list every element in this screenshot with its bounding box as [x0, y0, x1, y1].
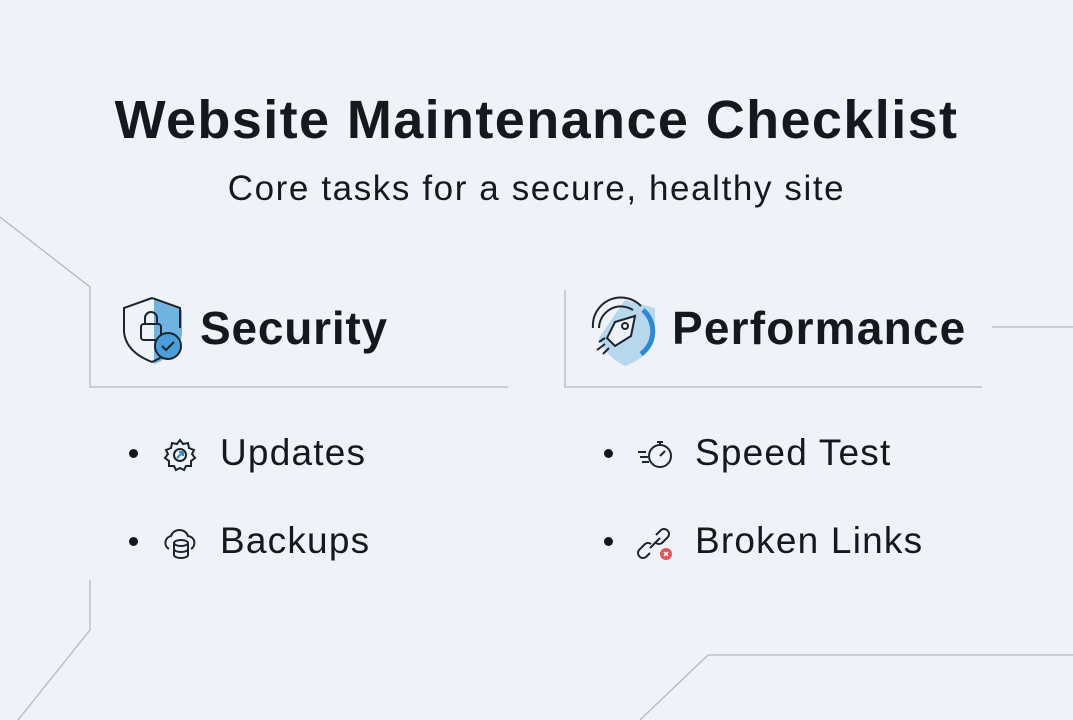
icon: broken link — [637, 528, 672, 560]
title: Website Maintenance Checklist — [115, 90, 958, 150]
heading: Performance — [672, 302, 966, 354]
panel: security — [123, 297, 388, 364]
panel: performance — [592, 296, 966, 366]
item: speed test: Speed Test — [695, 432, 891, 473]
item: backups — [129, 520, 370, 561]
icon: cloud db — [164, 529, 196, 559]
heading: Security — [200, 302, 388, 354]
icon: stopwatch — [638, 441, 672, 468]
icon: rocket gauge — [592, 296, 656, 366]
list: performance — [604, 432, 923, 561]
icon: shield — [123, 297, 182, 364]
item: updates — [129, 432, 366, 473]
item: backups: Backups — [220, 520, 370, 561]
icon: gear — [164, 438, 196, 472]
list: security — [129, 432, 370, 561]
subtitle: Core tasks for a secure, healthy site — [228, 169, 845, 208]
item: speed test — [604, 432, 891, 473]
item: broken links: Broken Links — [695, 520, 923, 561]
item: updates: Updates — [220, 432, 366, 473]
